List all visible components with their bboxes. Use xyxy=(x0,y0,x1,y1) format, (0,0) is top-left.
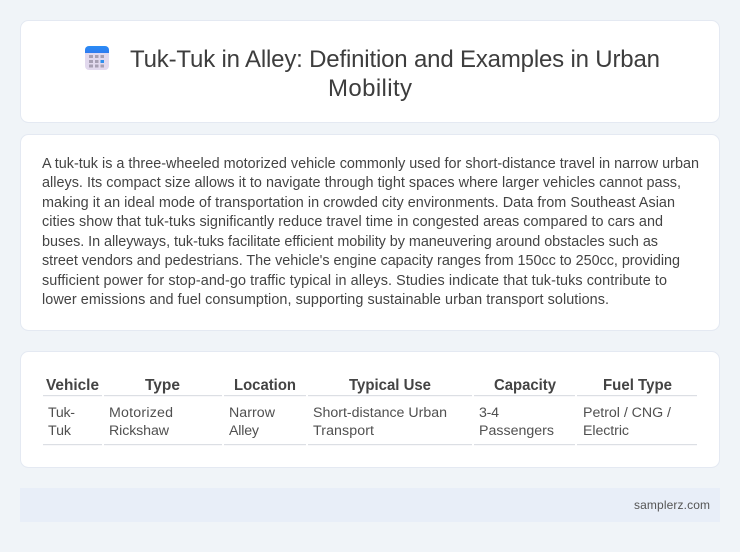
table row: Tuk- xyxy=(48,405,75,421)
table header xyxy=(46,377,672,394)
table row: Electric xyxy=(583,423,629,439)
table row: Narrow xyxy=(229,405,276,421)
table row: Short-distance Urban xyxy=(313,405,447,421)
title text: Tuk-Tuk in Alley: Definition and Examples in Urban xyxy=(130,46,660,73)
table row: Rickshaw xyxy=(109,423,170,439)
description text: alleys. Its compact size allows it to navigate through tight spaces where larger vehicles cannot pass, xyxy=(42,175,681,191)
table row: Tuk xyxy=(48,423,72,439)
footer xyxy=(20,488,720,522)
table row: Passengers xyxy=(479,423,554,439)
icon: calendar xyxy=(85,46,109,70)
title text: Mobility xyxy=(328,75,412,102)
table row xyxy=(48,405,671,439)
description text xyxy=(42,156,699,308)
table row: Petrol / CNG / xyxy=(583,405,671,421)
description text: buses. In alleyways, tuk-tuks facilitate efficient mobility by maneuvering around obstacles such as xyxy=(42,234,658,250)
table row: Motorized xyxy=(109,405,173,421)
panel: description xyxy=(20,134,720,330)
table header: Capacity xyxy=(494,377,556,394)
table header: Location xyxy=(234,377,296,394)
table header: Typical Use xyxy=(349,377,431,394)
table row: Alley xyxy=(229,423,260,439)
panel: table xyxy=(20,352,720,468)
description text: making it an ideal mode of transportation in crowded city environments. Data from Southeast Asian xyxy=(42,195,675,211)
description text: A tuk-tuk is a three-wheeled motorized vehicle commonly used for short-distance travel in narrow urban xyxy=(42,156,699,172)
table header: Vehicle xyxy=(46,377,99,394)
table header: Type xyxy=(145,377,180,394)
description text: cities show that tuk-tuks significantly reduce travel time in congested areas compared to cars and xyxy=(42,214,663,230)
description text: street vendors and pedestrians. The vehicle's engine capacity ranges from 150cc to 250cc, providing xyxy=(42,253,680,269)
footer: samplerz.com xyxy=(634,498,710,512)
description text: lower emissions and fuel consumption, supporting sustainable urban transport solutions. xyxy=(42,292,609,308)
title text xyxy=(130,46,660,102)
table row: 3-4 xyxy=(479,405,499,421)
table header: Fuel Type xyxy=(603,377,672,394)
description text: sufficient power for stop-and-go traffic typical in alleys. Studies indicate that tuk-tuks contribute to xyxy=(42,273,667,289)
panel: title xyxy=(20,20,720,122)
table row: Transport xyxy=(313,423,374,439)
